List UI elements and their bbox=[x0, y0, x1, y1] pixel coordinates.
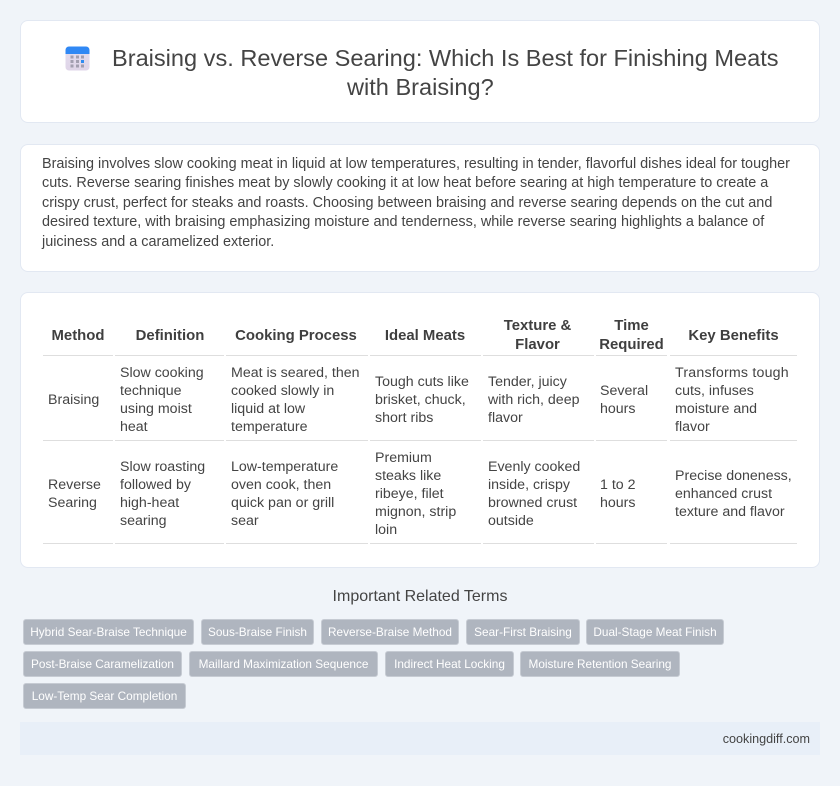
table row: reverse searing: browned crust bbox=[488, 495, 577, 511]
panel: description bbox=[20, 144, 820, 272]
related term tags: Dual-Stage Meat Finish bbox=[593, 625, 717, 639]
table row: braising: flavor bbox=[675, 419, 710, 435]
table row: braising: temperature bbox=[231, 419, 308, 435]
table row: reverse searing: sear bbox=[231, 513, 259, 529]
table row: reverse searing: inside, crispy bbox=[488, 477, 570, 493]
table row: reverse searing: enhanced crust bbox=[675, 486, 772, 502]
footer source text: cookingdiff.com bbox=[723, 732, 810, 746]
footer bbox=[20, 722, 820, 755]
table row: reverse searing: Precise doneness, bbox=[675, 468, 792, 484]
panel: comparison table bbox=[20, 292, 820, 568]
table row: braising: Transforms tough bbox=[675, 365, 789, 381]
table header row bbox=[52, 318, 779, 353]
table row: braising: Tender, juicy bbox=[488, 374, 567, 390]
table header row: Cooking Process bbox=[235, 328, 357, 344]
table header row: Texture & bbox=[504, 318, 571, 334]
table row: braising: Slow cooking bbox=[120, 365, 204, 381]
table row: braising: Braising bbox=[48, 392, 99, 408]
table row: braising: flavor bbox=[488, 410, 523, 426]
related term tags: Indirect Heat Locking bbox=[394, 657, 505, 671]
table row: braising: cooked slowly in bbox=[231, 383, 334, 399]
table row: braising: heat bbox=[120, 419, 148, 435]
table row: reverse searing: Evenly cooked bbox=[488, 459, 580, 475]
related term tags: Low-Temp Sear Completion bbox=[32, 689, 177, 703]
related term tags: Hybrid Sear-Braise Technique bbox=[30, 625, 187, 639]
title: with Braising? bbox=[347, 74, 494, 100]
table header row: Ideal Meats bbox=[385, 328, 465, 344]
table row: braising: Several bbox=[600, 383, 648, 399]
table row: braising: moisture and bbox=[675, 401, 757, 417]
related term tags: Sear-First Braising bbox=[474, 625, 572, 639]
text block: description: juiciness and a caramelized exterior. bbox=[42, 234, 274, 250]
table row: reverse searing: followed by bbox=[120, 477, 191, 493]
table row: braising: Tough cuts like bbox=[375, 374, 469, 390]
table row: reverse searing: searing bbox=[120, 513, 167, 529]
table row: braising: short ribs bbox=[375, 410, 433, 426]
heading: related terms: Important Related Terms bbox=[333, 588, 507, 605]
related term tags: Moisture Retention Searing bbox=[529, 657, 671, 671]
text block: description: cuts. Reverse searing finishes meat by slowly cooking it at low heat before searing at high temperature to create a bbox=[42, 175, 768, 191]
table row: reverse searing: Low-temperature bbox=[231, 459, 338, 475]
table header row: Time bbox=[614, 318, 649, 334]
table row: reverse searing: hours bbox=[600, 495, 636, 511]
text block: description: Braising involves slow cooking meat in liquid at low temperatures, resulting in tender, flavorful dishes ideal for tougher bbox=[42, 156, 790, 172]
table header row: Method bbox=[52, 328, 104, 344]
table header row: Definition bbox=[136, 328, 204, 344]
related term tags: Sous-Braise Finish bbox=[208, 625, 307, 639]
table row: braising: liquid at low bbox=[231, 401, 305, 417]
table row: reverse searing: steaks like bbox=[375, 468, 441, 484]
related term tags: Maillard Maximization Sequence bbox=[199, 657, 368, 671]
title bbox=[112, 45, 779, 100]
table row: reverse searing: loin bbox=[375, 522, 397, 538]
panel: header bbox=[20, 20, 820, 123]
table row: braising: brisket, chuck, bbox=[375, 392, 466, 408]
related term tags: Post-Braise Caramelization bbox=[31, 657, 174, 671]
table row: reverse searing: 1 to 2 bbox=[600, 477, 636, 493]
table header row: Flavor bbox=[515, 337, 560, 353]
table row: reverse searing: outside bbox=[488, 513, 534, 529]
related term tags bbox=[23, 619, 724, 709]
table header row: Key Benefits bbox=[688, 328, 779, 344]
table row: reverse searing: oven cook, then bbox=[231, 477, 331, 493]
table row: braising: hours bbox=[600, 401, 636, 417]
table row: braising: using moist bbox=[120, 401, 192, 417]
table row: reverse searing bbox=[48, 450, 792, 538]
icon: calendar bbox=[66, 46, 90, 70]
table row: braising bbox=[48, 365, 789, 435]
table row: reverse searing: Slow roasting bbox=[120, 459, 205, 475]
table row: reverse searing: Reverse bbox=[48, 477, 101, 493]
table row: reverse searing: high-heat bbox=[120, 495, 179, 511]
text block: description: desired texture, with braising emphasizing moisture and tenderness, while reverse searing highlights a balance of bbox=[42, 214, 764, 230]
table row: braising: with rich, deep bbox=[488, 392, 579, 408]
text block: description bbox=[42, 156, 790, 250]
related term tags: Reverse-Braise Method bbox=[328, 625, 452, 639]
table header row: Required bbox=[599, 337, 664, 353]
table row: braising: Meat is seared, then bbox=[231, 365, 360, 381]
table row: reverse searing: quick pan or grill bbox=[231, 495, 334, 511]
text block: description: crispy crust, perfect for steaks and roasts. Choosing between braising and reverse searing depends on the cut and bbox=[42, 195, 772, 211]
table row: braising: technique bbox=[120, 383, 182, 399]
title: Braising vs. Reverse Searing: Which Is Best for Finishing Meats bbox=[112, 45, 779, 71]
table row: reverse searing: mignon, strip bbox=[375, 504, 456, 520]
table row: reverse searing: ribeye, filet bbox=[375, 486, 444, 502]
table row: reverse searing: Searing bbox=[48, 495, 97, 511]
table row: reverse searing: texture and flavor bbox=[675, 504, 785, 520]
table row: braising: cuts, infuses bbox=[675, 383, 754, 399]
table row: reverse searing: Premium bbox=[375, 450, 432, 466]
